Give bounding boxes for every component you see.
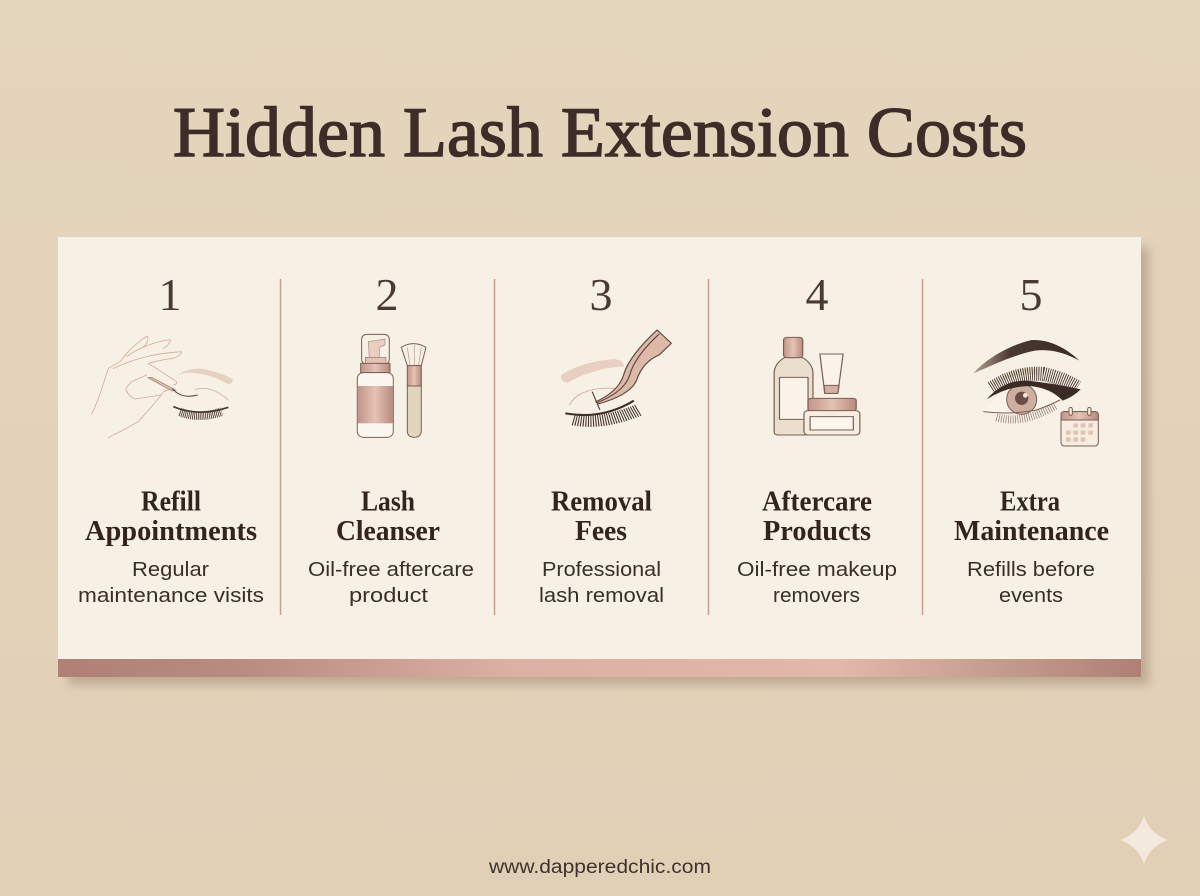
description: events <box>999 585 1063 607</box>
number 4: 4 <box>806 269 828 320</box>
description: lash removal <box>539 585 664 607</box>
icon: foam cleanser bottle and brush <box>357 334 426 437</box>
icon: tweezers removing lash <box>561 330 671 421</box>
number 3: 3 <box>590 269 612 320</box>
icon: aftercare bottle, tube and jar <box>774 337 860 435</box>
heading: Maintenance <box>954 516 1109 547</box>
heading: Appointments <box>85 516 257 547</box>
number 2: 2 <box>376 269 398 320</box>
description: removers <box>773 585 860 607</box>
description: Professional <box>542 559 661 581</box>
title: Hidden Lash Extension Costs <box>173 94 1027 172</box>
heading: Cleanser <box>336 516 440 547</box>
heading: Aftercare <box>762 486 872 518</box>
description <box>737 559 897 607</box>
column 4: aftercare products <box>737 269 897 607</box>
rose gold footer bar <box>58 659 1141 677</box>
heading: Extra <box>1000 486 1060 518</box>
heading <box>954 486 1109 547</box>
column 3: removal fees <box>539 269 671 607</box>
heading: Refill <box>141 486 201 518</box>
description: Refills before <box>967 559 1095 581</box>
description: Regular <box>132 559 209 581</box>
description <box>967 559 1095 607</box>
website url: www.dapperedchic.com <box>488 857 711 878</box>
heading: Products <box>763 516 871 547</box>
column 2: lash cleanser <box>308 269 474 607</box>
description: Oil-free aftercare <box>308 559 474 581</box>
column 5: extra maintenance <box>954 269 1109 607</box>
heading: Lash <box>361 486 415 518</box>
icon: glamorous eye with calendar <box>973 340 1098 446</box>
heading: Removal <box>551 486 652 518</box>
number 5: 5 <box>1020 269 1042 320</box>
number 1: 1 <box>158 269 182 320</box>
heading <box>551 486 652 547</box>
heading <box>762 486 872 547</box>
column 1: refill appointments <box>78 269 264 607</box>
description: maintenance visits <box>78 585 264 607</box>
icon: sparkle <box>1120 816 1168 864</box>
heading <box>85 486 257 547</box>
heading <box>336 486 440 547</box>
description <box>78 559 264 607</box>
panel: cost card <box>58 237 1149 685</box>
description: product <box>349 585 429 607</box>
icon: hand applying lash with tweezers <box>92 336 233 437</box>
description <box>539 559 664 607</box>
heading: Fees <box>575 516 627 547</box>
description: Oil-free makeup <box>737 559 897 581</box>
description <box>308 559 474 607</box>
